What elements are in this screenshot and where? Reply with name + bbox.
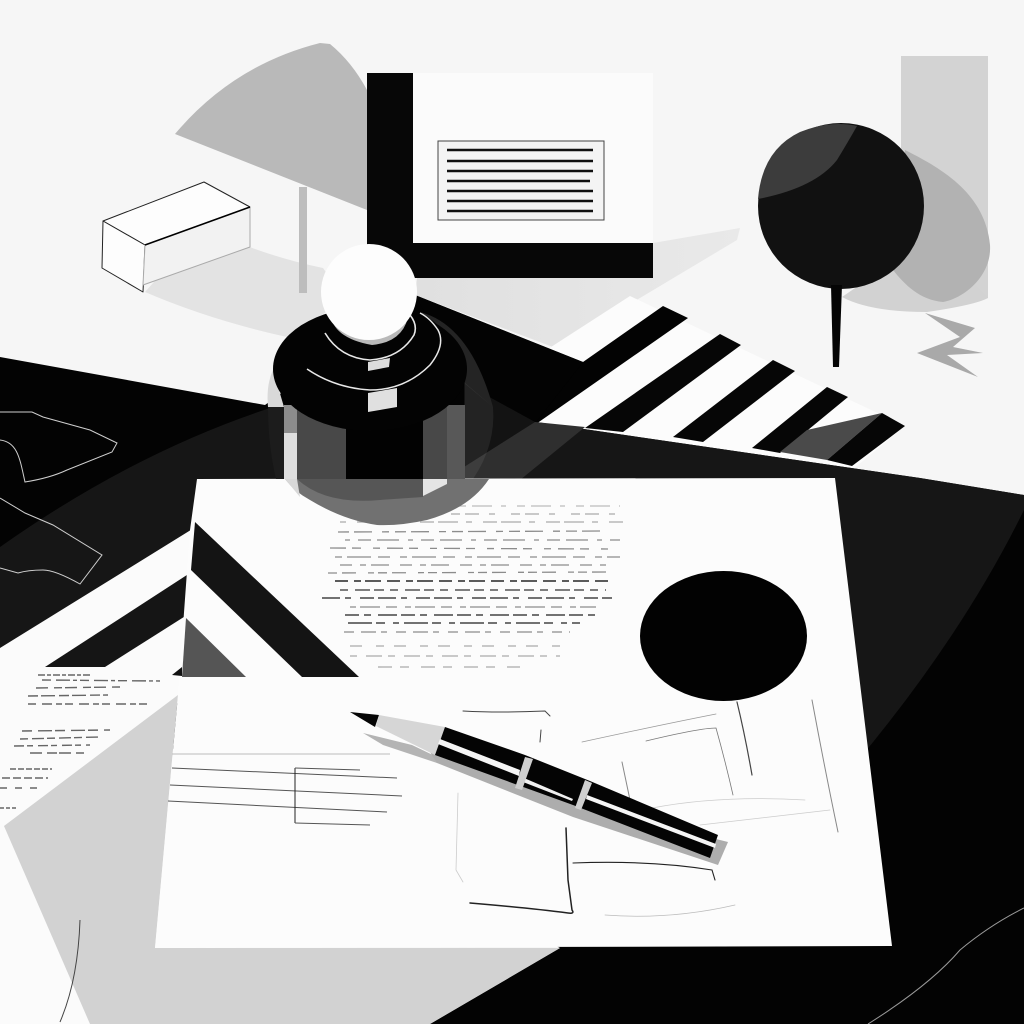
- left light panel: [284, 433, 297, 479]
- panel: grey lower left wedge: [4, 695, 560, 1024]
- chart sketch lines left of pen: [168, 754, 402, 825]
- collar: [330, 312, 409, 345]
- glass shoulder dark arc: [420, 312, 493, 407]
- icon: large black circle: [640, 571, 807, 701]
- icon: inkwell with glass base: [268, 244, 493, 525]
- dark shadow blob behind circle: [893, 150, 990, 302]
- grey glass body: [297, 405, 465, 479]
- hand-drawn sketch lines right: [456, 700, 838, 916]
- white stripe mid: [523, 778, 573, 801]
- icon: fountain pen: [350, 712, 728, 865]
- panel: main white paper: [155, 478, 892, 948]
- nib tip: [350, 712, 379, 727]
- curved line bottom right: [868, 908, 1024, 1024]
- left upper grey panel: [284, 405, 297, 434]
- light shadow below circle: [842, 262, 988, 312]
- glass left edge on background: [268, 370, 284, 407]
- right lighter band: [447, 405, 465, 479]
- glass right edge: [465, 383, 493, 479]
- icon: grey zigzag: [917, 313, 983, 377]
- icon: white wireframe box: [102, 182, 250, 292]
- pen shadow: [430, 752, 728, 865]
- small black wedge: [172, 667, 182, 676]
- panel: lower left paper with notes: [0, 528, 194, 1024]
- diagonal stripe: [45, 573, 190, 667]
- squiggle outlines: [0, 412, 117, 584]
- grey triangle stripe: [182, 618, 246, 677]
- text scribble block: [322, 506, 625, 667]
- panel: striped sheet: [520, 296, 905, 470]
- shadow of box on surface: [145, 227, 345, 337]
- glass left dark section: [268, 407, 284, 479]
- white stripe front: [438, 739, 520, 776]
- black cap: [273, 307, 467, 431]
- white ball: [321, 244, 417, 340]
- white rings: [307, 313, 441, 390]
- pen shadow tail: [363, 733, 437, 763]
- fan stem: [299, 187, 307, 293]
- barrel: [435, 727, 718, 858]
- shadow under frame: [415, 228, 740, 347]
- icon: black circle on stem: [758, 123, 924, 367]
- silver bands: [515, 757, 533, 790]
- panel: black framed document: [367, 73, 653, 278]
- white stripe rear: [586, 795, 716, 848]
- black diagonal stripe: [191, 522, 359, 677]
- lower glass on paper: [285, 479, 489, 525]
- center dark column: [346, 415, 423, 479]
- list box with lines: [438, 141, 604, 220]
- cap reflections: [368, 358, 390, 371]
- panel: black desk surface: [0, 295, 1024, 1024]
- note scribbles: [0, 675, 160, 808]
- silver grip: [376, 715, 445, 755]
- panel: grey fan shape top left: [175, 43, 367, 210]
- panel: grey tall rectangle top right: [901, 56, 988, 298]
- curved line on grey wedge: [60, 920, 80, 1022]
